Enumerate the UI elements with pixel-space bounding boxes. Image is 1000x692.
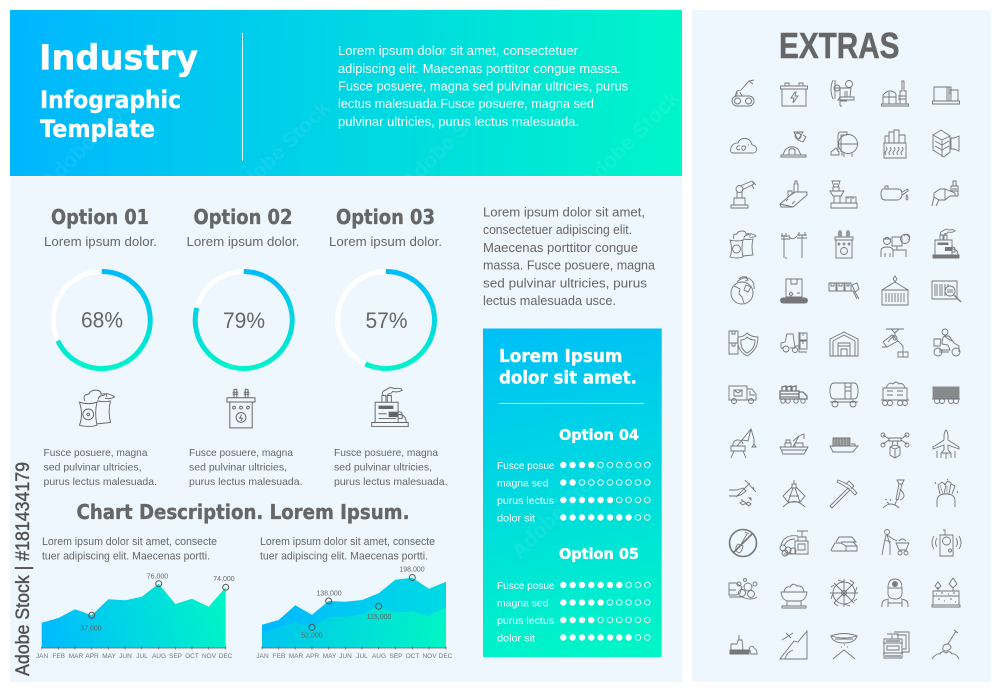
axis and months: JAN bbox=[36, 653, 48, 660]
data markers bbox=[309, 574, 415, 630]
icon: storage tanks bbox=[932, 87, 960, 104]
watermarks: Adobe Stock bbox=[577, 86, 685, 194]
description: Fusce posuere, magna bbox=[189, 447, 293, 459]
panel heading: dolor sit amet. bbox=[499, 368, 637, 388]
header paragraph: Lorem ipsum dolor sit amet, consectetuer bbox=[338, 43, 579, 58]
axis and months: FEB bbox=[273, 653, 285, 660]
icon: co2 cloud bbox=[731, 138, 757, 153]
chart text: Lorem ipsum dolor sit amet, consecte bbox=[260, 536, 435, 548]
axis and months: OCT bbox=[406, 653, 419, 660]
chart text bbox=[42, 536, 217, 562]
icon: battery bbox=[780, 83, 808, 106]
icon: hand with pickaxe bbox=[729, 480, 756, 506]
panel: option 01 bbox=[44, 205, 157, 488]
icon: factory heat bbox=[884, 130, 906, 158]
icon: container ship bbox=[830, 438, 858, 452]
text block: right paragraph: consectetuer adipiscing elit. bbox=[483, 222, 632, 237]
icon: operator at screen bbox=[881, 234, 910, 257]
icon: miner with cart bbox=[882, 530, 909, 555]
axis and months: JUL bbox=[136, 653, 148, 660]
icon: shovel bbox=[932, 630, 959, 659]
description bbox=[189, 447, 302, 488]
axis and months: OCT bbox=[185, 653, 199, 660]
icon: gems on rock bbox=[935, 479, 958, 507]
axis and months: DEC bbox=[219, 653, 233, 660]
area chart one bbox=[42, 584, 226, 648]
header paragraph: adipiscing elit. Maecenas porttitor congue massa. bbox=[338, 61, 621, 76]
axis and months: MAR bbox=[289, 653, 304, 660]
icon: transformer bbox=[227, 389, 255, 428]
header paragraph: Fusce posuere, magna sed pulvinar ultricies, purus bbox=[338, 78, 628, 94]
icon: warehouse bbox=[830, 332, 858, 356]
watermarks: Adobe Stock bbox=[847, 106, 955, 214]
data labels bbox=[301, 566, 425, 640]
rating rows: option 05: magna sed bbox=[497, 598, 549, 610]
heading: option 04: Option 04 bbox=[559, 426, 639, 444]
header paragraph: lectus malesuada.Fusce posuere, magna sed bbox=[338, 96, 594, 111]
icon: oil can bbox=[881, 186, 908, 200]
icon: paper roll bbox=[933, 130, 959, 157]
description: purus lectus malesuada. bbox=[44, 476, 157, 488]
subheading: Lorem ipsum dolor. bbox=[329, 234, 442, 249]
description: sed pulvinar ultricies, bbox=[334, 462, 432, 474]
text block: right paragraph: Maecenas porttitor congue bbox=[483, 240, 638, 255]
text block: right paragraph bbox=[483, 204, 656, 308]
title: Industry bbox=[39, 38, 198, 78]
heading: option 03: Option 03 bbox=[336, 205, 435, 229]
watermarks: Adobe Stock bbox=[342, 296, 450, 404]
watermarks: Adobe Stock bbox=[397, 86, 505, 194]
icon: mining gears bbox=[729, 578, 757, 599]
donut: 79% bbox=[195, 272, 292, 368]
data labels bbox=[80, 574, 235, 632]
watermarks: Adobe Stock bbox=[107, 456, 215, 564]
axis and months: JUN bbox=[339, 653, 352, 660]
area chart two: back series bbox=[262, 578, 446, 648]
heading: chart description: Chart Description. Lorem Ipsum. bbox=[76, 500, 410, 524]
rating rows: option 04 bbox=[497, 460, 650, 524]
watermarks: Adobe Stock bbox=[7, 281, 115, 389]
icon: bucket wheel bbox=[830, 579, 858, 607]
icon: gas detector bbox=[932, 530, 961, 556]
axis and months: AUG bbox=[152, 653, 166, 660]
icon: pickaxe bbox=[830, 480, 857, 508]
icon: cargo ship bbox=[780, 434, 808, 454]
rating rows: option 05: purus lectus bbox=[497, 615, 554, 627]
rating rows: option 05 bbox=[497, 580, 650, 644]
data labels: 138,000 bbox=[316, 590, 342, 598]
icon: package shield bbox=[729, 331, 758, 356]
icon: jackhammer bbox=[883, 480, 904, 508]
chart text: Lorem ipsum dolor sit amet, consecte bbox=[42, 536, 217, 548]
panel heading: Lorem Ipsum bbox=[499, 347, 622, 367]
watermarks: Adobe Stock bbox=[867, 286, 975, 394]
axis and months: FEB bbox=[52, 653, 65, 660]
axis and months: APR bbox=[306, 653, 319, 660]
description bbox=[44, 447, 157, 488]
icon: bottling machine bbox=[830, 181, 857, 208]
icon: boxes on belt bbox=[829, 283, 859, 299]
icon: ore crusher bbox=[781, 132, 806, 157]
chart text: tuer adipiscing elit. Maecenas portti. bbox=[260, 550, 428, 562]
icon: airplane bbox=[933, 430, 959, 459]
icon: robot arm bbox=[731, 181, 756, 208]
panel: option 03 bbox=[329, 205, 448, 488]
watermarks: Adobe Stock bbox=[227, 96, 335, 204]
panel: left chart bbox=[36, 536, 235, 660]
icon: ore bowl bbox=[781, 584, 807, 608]
icon: robot on tracks bbox=[732, 80, 754, 106]
rating rows: option 04: magna sed bbox=[497, 478, 549, 490]
watermarks: Adobe Stock bbox=[707, 86, 815, 194]
icon: mining cabin bbox=[883, 632, 909, 658]
icon: gold bars bbox=[831, 537, 857, 551]
panel: right chart bbox=[256, 536, 453, 660]
data labels: 74,000 bbox=[213, 576, 235, 583]
watermarks bbox=[7, 86, 975, 644]
panel: extras icons bbox=[729, 25, 961, 659]
axis and months: DEC bbox=[439, 653, 453, 660]
axis and months: JUL bbox=[356, 653, 368, 660]
panel: option 02 bbox=[186, 205, 302, 488]
data markers bbox=[89, 581, 229, 618]
icon: package on conveyor bbox=[780, 279, 808, 303]
icon: warehouse robot bbox=[882, 329, 908, 357]
icon: nuclear power plant bbox=[79, 390, 115, 427]
axis and months: SEP bbox=[169, 653, 182, 660]
axis and months: SEP bbox=[389, 653, 403, 660]
description: Fusce posuere, magna bbox=[334, 447, 438, 459]
icon: factory bbox=[933, 229, 959, 258]
header paragraph: pulvinar ultricies, purus lectus malesuada. bbox=[338, 114, 579, 129]
watermarks: Adobe Stock bbox=[717, 296, 825, 404]
text block: right paragraph: massa. Fusce posuere, magna bbox=[483, 258, 656, 272]
heading: option 01: Option 01 bbox=[51, 205, 149, 229]
watermark id: Adobe Stock | #181434179 bbox=[13, 462, 34, 676]
subtitle line one: Infographic bbox=[40, 86, 181, 114]
watermarks: Adobe Stock bbox=[257, 516, 365, 624]
donut: 79%: 79% bbox=[223, 308, 265, 333]
axis and months: MAY bbox=[323, 653, 337, 660]
rating rows: option 05: dolor sit bbox=[497, 632, 535, 644]
panel: gradient ratings bbox=[483, 328, 662, 657]
icon: bottle conveyor bbox=[780, 181, 807, 207]
data labels: 76,000 bbox=[147, 574, 168, 580]
rating rows: option 04: Fusce posue bbox=[497, 460, 555, 472]
icon: coal wagon bbox=[881, 382, 909, 406]
axis and months: JAN bbox=[256, 653, 269, 660]
icon: transformer bbox=[835, 231, 853, 258]
axis and months: APR bbox=[85, 653, 99, 660]
text block: right paragraph: sed pulvinar ultricies, purus bbox=[483, 276, 648, 290]
icon: factory bbox=[372, 388, 408, 427]
axis and months: MAY bbox=[102, 653, 116, 660]
text block: right paragraph: lectus malesuada usce. bbox=[483, 293, 616, 308]
description: sed pulvinar ultricies, bbox=[189, 462, 287, 474]
axis and months bbox=[36, 646, 233, 660]
watermarks: Adobe Stock bbox=[507, 456, 615, 564]
text block: right paragraph: Lorem ipsum dolor sit amet, bbox=[483, 204, 645, 220]
axis and months: JUN bbox=[119, 653, 132, 660]
icon: cargo container bbox=[882, 276, 908, 305]
icon: soil layers bbox=[932, 578, 960, 607]
panel: header banner bbox=[10, 10, 682, 176]
icon: cargo drone bbox=[881, 433, 909, 458]
data labels: 115,000 bbox=[367, 614, 391, 621]
data labels: 198,000 bbox=[399, 566, 425, 574]
panel: extras background bbox=[692, 10, 991, 682]
icon: tank wagon bbox=[830, 383, 858, 407]
watermarks: Adobe Stock bbox=[867, 506, 975, 614]
rating rows: option 05: Fusce posue bbox=[497, 580, 555, 592]
panel heading bbox=[499, 347, 637, 388]
watermarks: Adobe Stock bbox=[207, 286, 315, 394]
area chart two: front series bbox=[262, 606, 446, 648]
heading: option 02: Option 02 bbox=[194, 205, 292, 229]
icon: forklift bbox=[781, 332, 807, 352]
icon: power poles bbox=[781, 232, 807, 258]
icon: harbor crane bbox=[731, 429, 756, 458]
panel: main background bbox=[10, 177, 682, 682]
icon: power plant bbox=[730, 231, 756, 258]
header paragraph bbox=[338, 43, 628, 129]
icon: ore pile and disk bbox=[831, 634, 857, 659]
axis and months bbox=[256, 646, 453, 660]
axis and months: MAR bbox=[69, 653, 84, 660]
icon: freight wagon bbox=[932, 387, 960, 404]
icon: refinery dome bbox=[882, 81, 908, 106]
donut: 68%: 68% bbox=[81, 308, 123, 332]
watermarks: Adobe Stock bbox=[717, 536, 825, 644]
icon: coal press bbox=[780, 531, 808, 556]
subheading: Lorem ipsum dolor. bbox=[44, 234, 157, 249]
axis and months: NOV bbox=[422, 653, 437, 660]
subheading: Lorem ipsum dolor. bbox=[186, 234, 300, 249]
donut: 57% bbox=[338, 271, 435, 369]
subtitle line two: Template bbox=[40, 115, 155, 143]
rating rows: option 04: dolor sit bbox=[497, 512, 535, 524]
icon: barcode search bbox=[932, 281, 961, 302]
icon grid bbox=[729, 80, 961, 659]
heading: extras: EXTRAS bbox=[779, 25, 900, 66]
icon: mountain pick bbox=[780, 631, 807, 659]
axis and months: NOV bbox=[202, 653, 217, 660]
data labels: 37,000 bbox=[80, 626, 102, 632]
description: Fusce posuere, magna bbox=[44, 447, 148, 459]
icon: log truck bbox=[780, 386, 807, 403]
donut: 68% bbox=[53, 272, 150, 368]
rating rows: option 04: purus lectus bbox=[497, 495, 554, 507]
icon: clamshell bucket bbox=[783, 480, 805, 507]
chart text: tuer adipiscing elit. Maecenas portti. bbox=[42, 550, 210, 562]
axis and months: AUG bbox=[372, 653, 386, 660]
icon: bulldozer bbox=[730, 635, 757, 654]
watermarks: Adobe Stock bbox=[37, 86, 145, 194]
description bbox=[334, 447, 448, 488]
icon: no digging sign bbox=[730, 530, 756, 556]
description: purus lectus malesuada. bbox=[334, 476, 448, 488]
data labels: 52,000 bbox=[301, 632, 323, 640]
icon: delivery scooter bbox=[934, 329, 960, 356]
icon: press machine bbox=[831, 80, 854, 106]
icon: global shipping bbox=[731, 277, 754, 304]
description: sed pulvinar ultricies, bbox=[44, 462, 142, 474]
icon: delivery truck bbox=[729, 386, 756, 404]
icon: miner portrait bbox=[882, 579, 908, 607]
donut: 57%: 57% bbox=[366, 308, 408, 333]
description: purus lectus malesuada. bbox=[189, 476, 302, 488]
chart text bbox=[260, 536, 435, 562]
icon: pipes and boiler bbox=[831, 132, 858, 157]
heading: option 05: Option 05 bbox=[559, 545, 639, 563]
icon: turbine bbox=[932, 181, 958, 206]
